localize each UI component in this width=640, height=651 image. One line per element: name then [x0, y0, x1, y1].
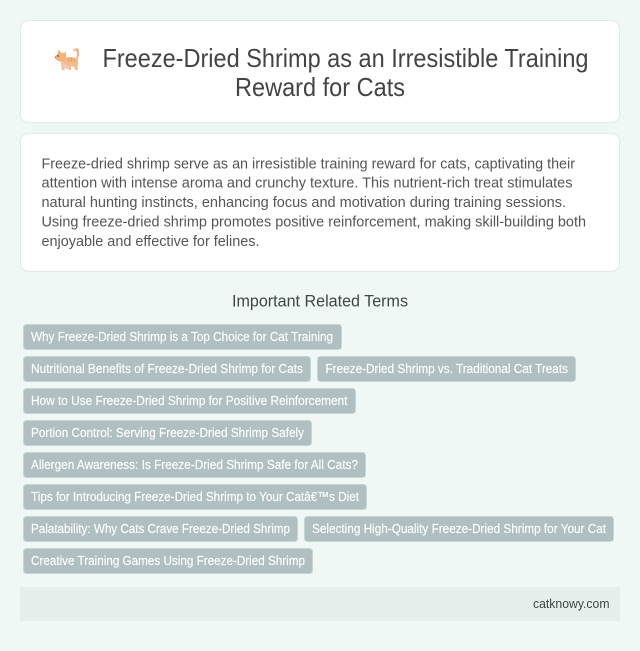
tag 10: Creative Training Games Using Freeze-Dried Shrimp — [31, 553, 305, 568]
tag 9 — [304, 516, 614, 542]
description text — [42, 155, 586, 250]
tag 5: Portion Control: Serving Freeze-Dried Shrimp Safely — [31, 425, 304, 440]
tag group: related terms — [24, 324, 614, 574]
icon: orange cat — [55, 48, 79, 70]
description text: enjoyable and effective for felines. — [42, 233, 260, 250]
title: Freeze-Dried Shrimp as an Irresistible Training — [102, 43, 588, 73]
tag 8 — [24, 516, 298, 542]
tag 7 — [24, 484, 366, 510]
tag 1 — [24, 324, 342, 350]
panel: description card — [20, 134, 620, 272]
footer source text: catknowy.com — [533, 596, 610, 611]
tag 8: Palatability: Why Cats Crave Freeze-Dried Shrimp — [31, 521, 290, 536]
tag 9: Selecting High-Quality Freeze-Dried Shrimp for Your Cat — [312, 521, 606, 536]
heading: important related terms: Important Related Terms — [232, 292, 408, 310]
tag 2 — [24, 356, 310, 382]
tag 1: Why Freeze-Dried Shrimp is a Top Choice for Cat Training — [31, 329, 333, 344]
tag 7: Tips for Introducing Freeze-Dried Shrimp to Your Catâ€™s Diet — [31, 489, 359, 504]
title: Reward for Cats — [235, 72, 405, 102]
title — [102, 43, 588, 102]
description text: Freeze-dried shrimp serve as an irresistible training reward for cats, captivating their — [42, 155, 575, 172]
description text: attention with intense aroma and crunchy texture. This nutrient-rich treat stimulates — [42, 175, 573, 192]
tag 3: Freeze-Dried Shrimp vs. Traditional Cat Treats — [326, 361, 568, 376]
tag 6: Allergen Awareness: Is Freeze-Dried Shrimp Safe for All Cats? — [31, 457, 358, 472]
tag 3 — [318, 356, 576, 382]
tag 4: How to Use Freeze-Dried Shrimp for Positive Reinforcement — [31, 393, 348, 408]
tag 5 — [24, 420, 312, 446]
footer — [20, 587, 620, 621]
description text: natural hunting instincts, enhancing focus and motivation during training sessions. — [42, 194, 566, 211]
tag 6 — [24, 452, 366, 478]
description text: Using freeze-dried shrimp promotes positive reinforcement, making skill-building both — [42, 214, 586, 230]
tag 2: Nutritional Benefits of Freeze-Dried Shrimp for Cats — [31, 361, 303, 376]
tag 10 — [24, 548, 312, 574]
panel: title card — [20, 20, 620, 122]
tag 4 — [24, 388, 356, 414]
